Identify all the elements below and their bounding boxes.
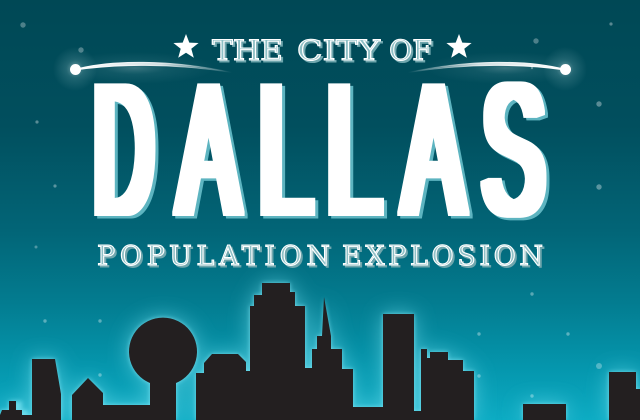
building: low block: [523, 404, 566, 420]
building: central skyline: [196, 283, 474, 420]
title: Dallas: [94, 44, 544, 255]
subtitle: population explosion: [97, 241, 543, 272]
heading: the city of: OF: [389, 34, 432, 67]
title: Dallas: L: [327, 45, 381, 254]
title: Dallas: L: [259, 46, 312, 254]
subtitle: population explosion: POPULATION: [97, 241, 330, 272]
title: Dallas: D: [94, 44, 153, 254]
title: Dallas: A: [404, 46, 463, 255]
building: right tower: [609, 372, 640, 420]
icon: right star: [446, 34, 472, 58]
building: far-left towers: [0, 359, 61, 420]
heading: the city of: THE: [212, 34, 283, 67]
title: Dallas: S: [482, 45, 544, 255]
heading: the city of: CITY: [297, 34, 381, 67]
left shooting star: [53, 47, 232, 91]
building: peaked house and reunion tower: [72, 318, 197, 420]
skyline silhouette: [0, 283, 640, 420]
heading: the city of: [212, 34, 432, 67]
skyline glow: [0, 283, 640, 420]
title: Dallas: A: [178, 46, 238, 255]
icon: left star: [173, 34, 199, 58]
right shooting star: [408, 47, 587, 91]
subtitle: population explosion: EXPLOSION: [342, 241, 543, 272]
